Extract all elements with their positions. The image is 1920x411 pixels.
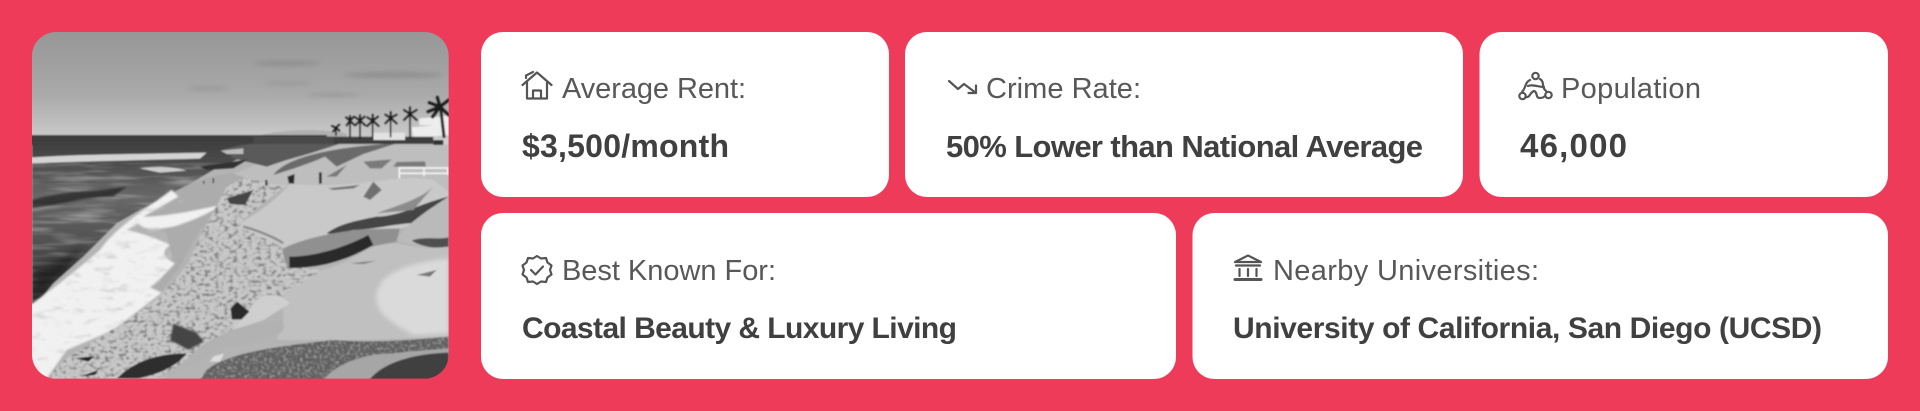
- dune top and grass slope: [235, 144, 448, 190]
- label: population: Population: [1561, 73, 1701, 105]
- value: best known for: Coastal Beauty & Luxury Living: [522, 312, 957, 345]
- icon: house: [522, 72, 552, 98]
- sea: [32, 144, 242, 305]
- bottom grass: [200, 337, 449, 380]
- upper cliff: [240, 178, 449, 249]
- icon: university building: [1235, 256, 1261, 280]
- panel: best known for: [481, 213, 1176, 379]
- value: crime rate comparison: 50% Lower than National Average: [946, 129, 1423, 164]
- panel: crime rate: [905, 32, 1463, 197]
- fence: [399, 167, 449, 178]
- lower dune: [277, 243, 449, 340]
- eroded rock spur: [236, 294, 289, 328]
- waterfront buildings: [253, 115, 449, 145]
- icon: trending down arrow: [949, 81, 976, 93]
- pebble beach: [48, 173, 323, 380]
- panel: population: [1480, 32, 1888, 197]
- surf: [23, 190, 222, 379]
- value: population count: 46,000: [1520, 127, 1627, 164]
- icon: people circle: [1519, 73, 1552, 99]
- value: university name: University of California, San Diego (UCSD): [1233, 312, 1822, 345]
- value: rent amount: $3,500/month: [522, 128, 729, 164]
- rock ledge: [283, 228, 400, 268]
- label: average rent: Average Rent:: [562, 73, 746, 105]
- icon: verified badge: [522, 256, 552, 284]
- wet sand: [174, 183, 215, 223]
- label: crime rate: Crime Rate:: [986, 73, 1141, 105]
- panel: nearby universities: [1192, 213, 1888, 379]
- label: best known for: Best Known For:: [562, 255, 776, 287]
- photo: coastal cliffs in black and white: [23, 27, 457, 387]
- palm trees: [332, 97, 449, 139]
- right rock: [410, 197, 448, 226]
- figures on the shore: [203, 172, 322, 185]
- panel: average rent: [481, 32, 889, 197]
- label: nearby universities: Nearby Universities:: [1273, 255, 1539, 287]
